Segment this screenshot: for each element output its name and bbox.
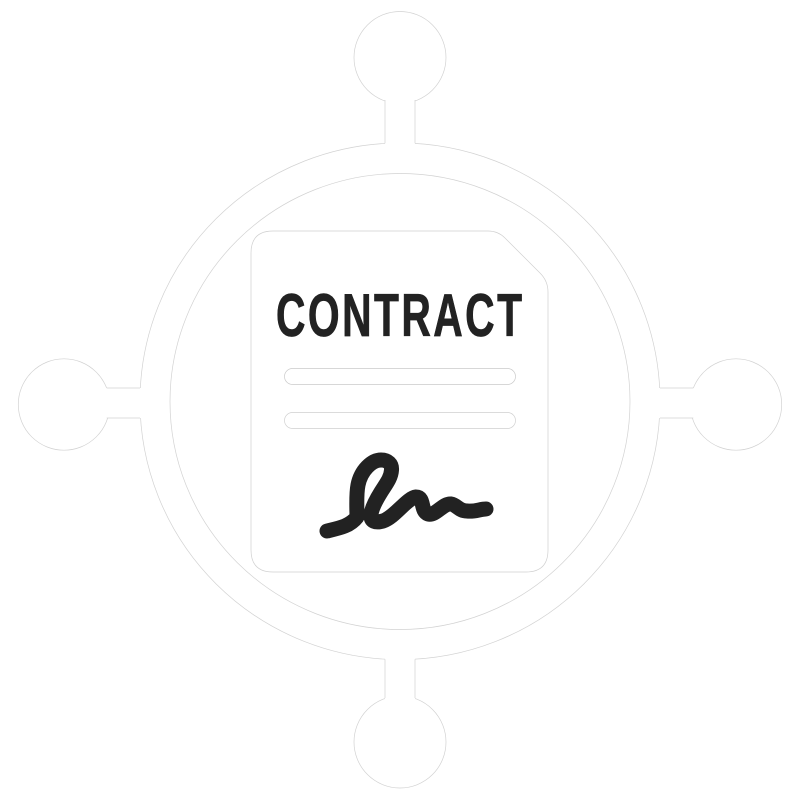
connectors <box>103 96 697 704</box>
inner ring <box>170 174 630 630</box>
outer ring <box>140 143 660 660</box>
node: bottom <box>354 696 446 788</box>
text line 1 <box>284 368 516 384</box>
document <box>251 231 548 572</box>
node: right <box>690 359 782 450</box>
title: CONTRACT: CONTRACT <box>276 282 524 349</box>
text line 2 <box>284 412 516 428</box>
signature <box>327 460 486 531</box>
node: left <box>18 359 110 450</box>
node: top <box>354 12 446 104</box>
